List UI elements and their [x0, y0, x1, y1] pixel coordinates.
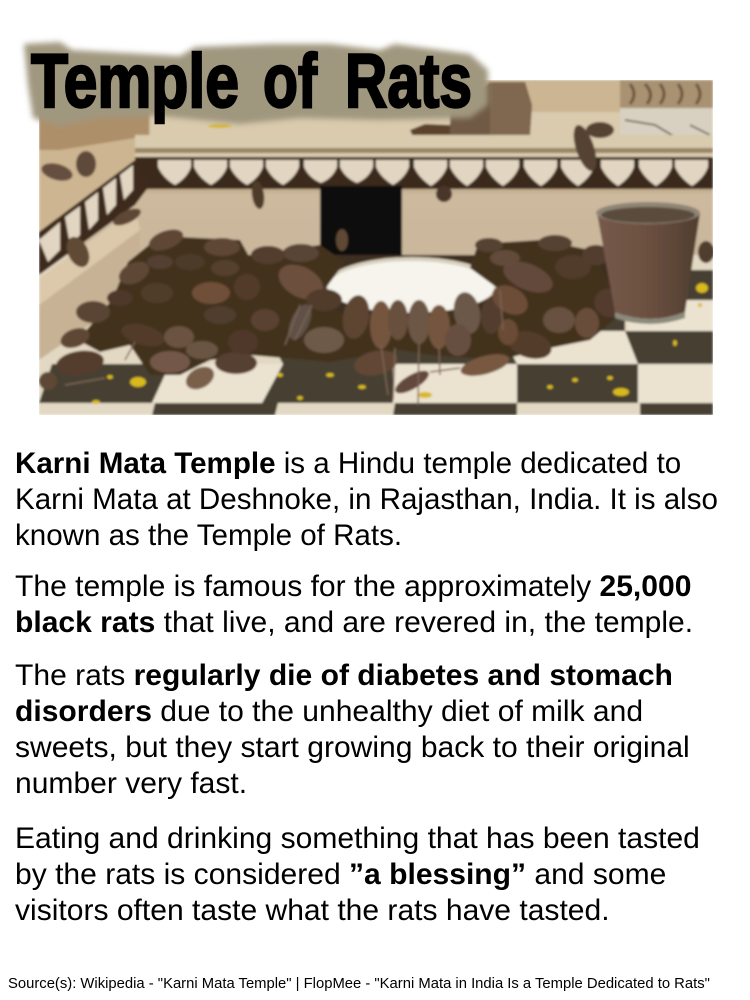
rat mass: [78, 236, 620, 375]
title: Rats: [345, 39, 472, 124]
checkered floor: [39, 255, 713, 415]
paragraph: 25,000 black rats: The temple is famous for the approximately 25,000: [15, 570, 691, 603]
scalloped frieze: [158, 160, 708, 186]
title: of: [263, 39, 318, 124]
paragraph: introduction: [15, 447, 718, 552]
paragraph: introduction: known as the Temple of Rats.: [15, 519, 402, 552]
paragraph: introduction: Karni Mata Temple is a Hindu temple dedicated to: [15, 447, 681, 480]
individual rats: [39, 122, 714, 398]
rat tails: [65, 290, 503, 405]
paragraph: diabetes and stomach disorders: disorders due to the unhealthy diet of milk and: [15, 695, 643, 728]
title: Temple: [31, 39, 239, 124]
paragraph: 25,000 black rats: black rats that live, and are revered in, the temple.: [15, 606, 693, 639]
metal bucket: [596, 202, 700, 324]
paragraph: a blessing: Eating and drinking something that has been tasted: [15, 822, 700, 855]
paragraph: diabetes and stomach disorders: The rats regularly die of diabetes and stomach: [15, 659, 673, 692]
left stepped wall: [39, 138, 135, 232]
paragraph: a blessing: visitors often taste what the rats have tasted.: [15, 894, 610, 927]
source line: Source(s): Wikipedia - "Karni Mata Temple" | FlopMee - "Karni Mata in India Is a Temple Dedicated to Rats": [8, 976, 710, 992]
paragraph: a blessing: [15, 822, 700, 927]
paragraph: a blessing: by the rats is considered ”a blessing” and some: [15, 858, 666, 891]
paragraph: introduction: Karni Mata at Deshnoke, in Rajasthan, India. It is also: [15, 483, 718, 516]
milk bowl: [326, 257, 498, 313]
photo: rats around a milk bowl in the temple: [39, 80, 714, 415]
paragraph: diabetes and stomach disorders: [15, 659, 690, 800]
ledge: [135, 135, 713, 159]
paragraph: diabetes and stomach disorders: number very fast.: [15, 767, 247, 800]
title backdrop: [24, 42, 488, 126]
dark doorway: [320, 186, 402, 262]
header artwork: photo and title: [20, 38, 713, 415]
wall below the ledge: [66, 186, 713, 256]
marble block with carving: [619, 107, 713, 136]
title: [31, 39, 472, 124]
paragraph: diabetes and stomach disorders: sweets, but they start growing back to their original: [15, 731, 690, 764]
upper temple floor: [148, 80, 622, 136]
stone block: [448, 82, 492, 136]
paragraph: 25,000 black rats: [15, 570, 693, 639]
